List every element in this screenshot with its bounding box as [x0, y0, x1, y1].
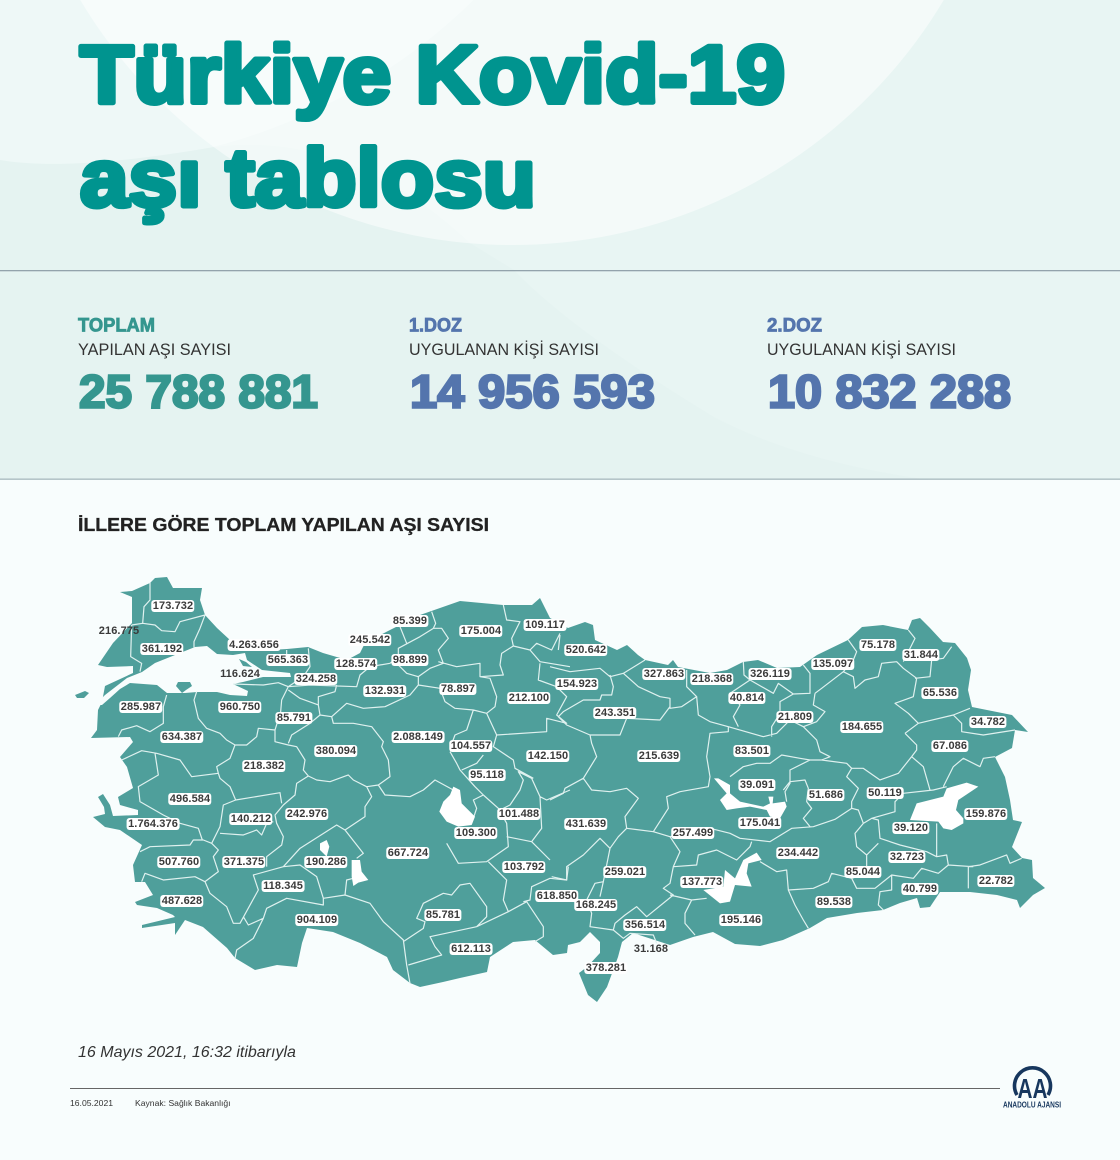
- province borders west: [118, 583, 570, 983]
- province value labels: 195.146: [721, 914, 761, 926]
- province value labels: 371.375: [224, 856, 264, 868]
- province value labels: 380.094: [316, 745, 356, 757]
- province value labels: 104.557: [451, 740, 491, 752]
- province value labels: 324.258: [296, 673, 336, 685]
- province value labels: 75.178: [861, 639, 895, 651]
- stat: toplam: YAPILAN AŞI SAYISI: [78, 341, 231, 359]
- province value labels: 361.192: [142, 643, 182, 655]
- province value labels: 109.117: [525, 619, 565, 631]
- province value labels: 378.281: [586, 962, 626, 974]
- province value labels: 612.113: [451, 943, 491, 955]
- province borders east: [550, 630, 1022, 943]
- province value labels: 50.119: [868, 787, 902, 799]
- footer rule and source: [70, 1088, 1000, 1109]
- province value labels: 618.850: [537, 890, 577, 902]
- stat: 2. doz: 2.DOZ: [767, 316, 822, 336]
- lakes west: [320, 787, 475, 886]
- province value labels: 34.782: [971, 716, 1005, 728]
- province value labels: 667.724: [388, 847, 428, 859]
- logo: Anadolu Ajansı: [1003, 1066, 1061, 1110]
- title: [78, 30, 785, 226]
- province value labels: 184.655: [842, 721, 882, 733]
- province value labels: 39.120: [894, 822, 928, 834]
- map heading: İLLERE GÖRE TOPLAM YAPILAN AŞI SAYISI: [78, 515, 489, 535]
- province value labels: 507.760: [159, 856, 199, 868]
- header and stats background: [0, 0, 1120, 480]
- province value labels: 103.792: [504, 861, 544, 873]
- province value labels: 520.642: [566, 644, 606, 656]
- footer rule and source: 16.05.2021: [70, 1098, 113, 1108]
- province value labels: 85.399: [393, 615, 427, 627]
- province value labels: 85.044: [846, 866, 880, 878]
- province value labels: 65.536: [923, 687, 957, 699]
- Marmara islands: [75, 659, 252, 698]
- province value labels: 285.987: [121, 701, 161, 713]
- stat: 1. doz: 14 956 593: [410, 366, 655, 418]
- province value labels: 218.382: [244, 760, 284, 772]
- province value labels: 32.723: [890, 851, 924, 863]
- province value labels: 154.923: [557, 678, 597, 690]
- province value labels: 1.764.376: [128, 818, 178, 830]
- province value labels: 137.773: [682, 876, 722, 888]
- stat: 2. doz: 10 832 288: [768, 366, 1011, 418]
- province value labels: 487.628: [162, 895, 202, 907]
- province value labels: 116.624: [220, 668, 260, 680]
- stat: toplam: TOPLAM: [78, 316, 155, 336]
- stat: 1. doz: [409, 316, 655, 418]
- province value labels: 904.109: [297, 914, 337, 926]
- province value labels: 245.542: [350, 634, 390, 646]
- province value labels: 327.863: [644, 668, 684, 680]
- province value labels: 128.574: [336, 658, 376, 670]
- province value labels: 135.097: [813, 658, 853, 670]
- province value labels: [99, 600, 1014, 974]
- province value labels: 431.639: [566, 818, 606, 830]
- province value labels: 39.091: [740, 779, 774, 791]
- province value labels: 175.004: [461, 625, 501, 637]
- province value labels: 98.899: [393, 654, 427, 666]
- province value labels: 496.584: [170, 793, 210, 805]
- title: Türkiye Kovid-19: [80, 30, 785, 120]
- province value labels: 85.781: [426, 909, 460, 921]
- province value labels: 89.538: [817, 896, 851, 908]
- province value labels: 85.791: [277, 712, 311, 724]
- province value labels: 2.088.149: [393, 731, 443, 743]
- province value labels: 142.150: [528, 750, 568, 762]
- province value labels: 4.263.656: [229, 639, 279, 651]
- province value labels: 175.041: [740, 817, 780, 829]
- province value labels: 218.368: [692, 673, 732, 685]
- province value labels: 78.897: [441, 683, 475, 695]
- province value labels: 83.501: [735, 745, 769, 757]
- stat: toplam: [78, 316, 318, 418]
- province value labels: 101.488: [499, 808, 539, 820]
- province value labels: 159.876: [966, 808, 1006, 820]
- province value labels: 109.300: [456, 827, 496, 839]
- stat: 2. doz: UYGULANAN KİŞİ SAYISI: [767, 340, 956, 359]
- province value labels: 259.021: [605, 866, 645, 878]
- stat: 1. doz: UYGULANAN KİŞİ SAYISI: [409, 340, 599, 359]
- province value labels: 31.168: [634, 943, 668, 955]
- province value labels: 634.387: [162, 731, 202, 743]
- footer rule and source: Kaynak: Sağlık Bakanlığı: [135, 1098, 231, 1108]
- province value labels: 51.686: [809, 789, 843, 801]
- province value labels: 234.442: [778, 847, 818, 859]
- province value labels: 257.499: [673, 827, 713, 839]
- province value labels: 21.809: [778, 711, 812, 723]
- province value labels: 168.245: [576, 899, 616, 911]
- province value labels: 95.118: [470, 769, 504, 781]
- lakes east: [703, 778, 978, 903]
- province value labels: 216.775: [99, 625, 139, 637]
- province value labels: 356.514: [625, 919, 665, 931]
- province value labels: 118.345: [263, 880, 303, 892]
- province value labels: 132.931: [365, 685, 405, 697]
- logo: Anadolu Ajansı: AA: [1018, 1073, 1048, 1104]
- province value labels: 565.363: [268, 654, 308, 666]
- province value labels: 190.286: [306, 856, 346, 868]
- province value labels: 960.750: [220, 701, 260, 713]
- province value labels: 212.100: [509, 692, 549, 704]
- province value labels: 215.639: [639, 750, 679, 762]
- sea of Marmara: [95, 646, 291, 705]
- stat: 2. doz: [767, 316, 1011, 418]
- province value labels: 242.976: [287, 808, 327, 820]
- province value labels: 31.844: [904, 649, 938, 661]
- stat: 1. doz: 1.DOZ: [409, 316, 462, 336]
- title: aşı tablosu: [80, 133, 536, 224]
- province value labels: 173.732: [153, 600, 193, 612]
- province value labels: 67.086: [933, 740, 967, 752]
- province value labels: 40.799: [903, 883, 937, 895]
- province value labels: 140.212: [231, 813, 271, 825]
- date note: 16 Mayıs 2021, 16:32 itibarıyla: [78, 1044, 296, 1061]
- province value labels: 243.351: [595, 707, 635, 719]
- stat: toplam: 25 788 881: [79, 366, 318, 418]
- province value labels: 40.814: [730, 692, 764, 704]
- province value labels: 22.782: [979, 875, 1013, 887]
- province value labels: 326.119: [750, 668, 790, 680]
